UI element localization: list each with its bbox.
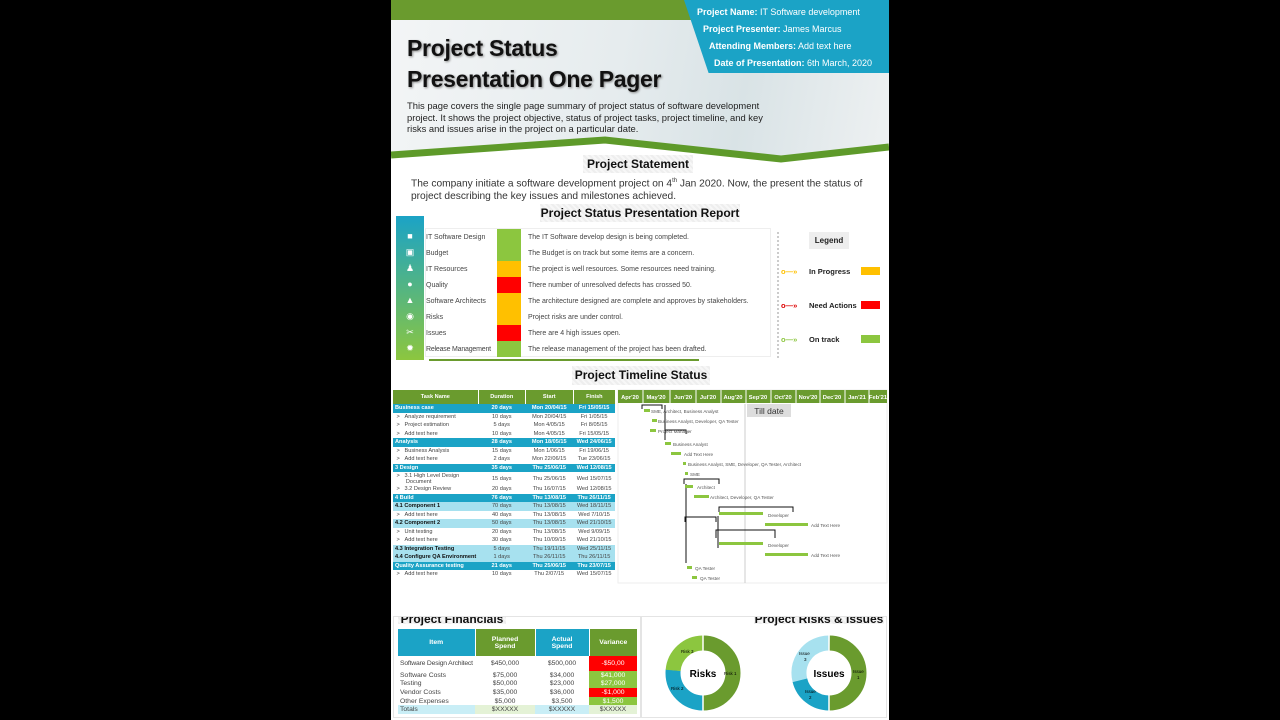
icon column: ✹	[406, 343, 414, 353]
status report table: Issues	[426, 330, 446, 336]
panel: project financials: $1,500	[603, 698, 623, 705]
chart: risks donut: Risk 1	[724, 671, 737, 676]
gantt task table: > Add text here	[397, 456, 438, 462]
gantt task table: 50 days	[492, 520, 512, 526]
gantt task table: Mon 20/04/15	[532, 405, 567, 411]
gantt task table: Thu 13/08/15	[533, 512, 566, 518]
gantt task table: > Add text here	[397, 512, 438, 518]
gantt chart: Dec'20	[823, 395, 841, 401]
gantt task table: Wed 15/07/15	[577, 476, 611, 482]
gantt task table: > Add text here	[397, 571, 438, 577]
project statement text: The company initiate a software development project on 4th Jan 2020. Now, the present the status of project describing the key issues and milestones achieved.	[411, 178, 862, 202]
heading: risks & issues	[754, 614, 884, 624]
status report table: Risks	[426, 314, 443, 320]
panel: project financials: $XXXXX	[492, 706, 518, 713]
gantt task table: Fri 19/06/15	[579, 448, 609, 454]
gantt task table: Finish	[586, 394, 603, 400]
panel: project financials: Software Costs	[400, 672, 446, 679]
gantt task table: > Add text here	[397, 431, 438, 437]
gantt task table: > Project estimation	[397, 422, 449, 428]
panel: project financials: Item	[429, 639, 443, 646]
project info box: Project Presenter: James Marcus	[703, 24, 842, 34]
gantt task table: 30 days	[492, 537, 512, 543]
status report table: The project is well resources. Some resources need training.	[528, 266, 716, 272]
project info box: Project Name: IT Software development	[697, 7, 860, 17]
icon column: ♟	[406, 263, 414, 273]
panel: project financials: Testing	[400, 680, 422, 687]
panel: project financials: -$1,000	[601, 689, 625, 696]
gantt chart: Jan'21	[848, 395, 867, 401]
gantt task table: Thu 13/08/15	[533, 520, 566, 526]
top green bar	[391, 0, 691, 20]
gantt task table: > 3.1 High Level Design	[397, 472, 459, 478]
icon column	[396, 216, 424, 360]
gantt task table: Wed 15/07/15	[577, 571, 611, 577]
gantt task table: Mon 22/06/15	[532, 456, 566, 462]
gantt task table: Wed 7/10/15	[578, 512, 610, 518]
gantt chart: QA Tester	[695, 566, 716, 571]
status report table: The Budget is on track but some items are a concern.	[528, 250, 694, 256]
status report table	[396, 216, 771, 361]
gantt task table: 5 days	[493, 422, 510, 428]
gantt task table: 4.4 Configure QA Environment	[395, 554, 476, 560]
gantt chart: Business Analyst, Developer, QA Tester	[658, 419, 739, 424]
chart: issues donut	[791, 636, 866, 710]
gantt task table: 4.1 Component 1	[395, 503, 440, 509]
legend	[777, 232, 885, 358]
gantt task table: Fri 1/05/15	[581, 414, 607, 420]
gantt chart: Till date	[754, 406, 784, 416]
icon column: ◉	[406, 311, 414, 321]
gantt task table: Thu 10/09/15	[533, 537, 566, 543]
status report table: IT Resources	[426, 266, 468, 272]
gantt task table: Fri 15/05/15	[579, 431, 609, 437]
chart: issues donut: Issue	[805, 689, 816, 694]
gantt chart: SME	[690, 472, 700, 477]
gantt chart: Business Analyst, SME, Developer, QA Tester, Architect	[688, 462, 802, 467]
chart: issues donut: 3	[804, 657, 807, 662]
gantt chart: Apr'20	[621, 395, 639, 401]
legend: Legend	[815, 236, 843, 245]
gantt chart: Architect	[697, 485, 716, 490]
gantt task table: Start	[543, 394, 556, 400]
project info box	[684, 0, 889, 73]
gantt task table: Analysis	[395, 439, 418, 445]
gantt task table: Thu 26/11/15	[578, 554, 610, 560]
panel: project financials: $XXXXX	[549, 706, 575, 713]
status report table: The IT Software develop design is being completed.	[528, 234, 689, 240]
gantt task table: Mon 4/05/15	[534, 422, 565, 428]
panel: project financials: $23,000	[550, 680, 574, 687]
gantt chart: May'20	[646, 395, 666, 401]
gantt task table: Wed 9/09/15	[578, 529, 610, 535]
panel: project financials: -$50,00	[601, 660, 625, 667]
gantt task table: Thu 13/08/15	[533, 503, 566, 509]
panel: project financials: $5,000	[495, 698, 515, 705]
panel: project financials: Software Design Architect	[400, 660, 473, 667]
chart: risks donut	[666, 636, 740, 710]
gantt task table: 4 Build	[395, 495, 414, 501]
gantt task table: Wed 18/11/15	[577, 503, 611, 509]
title: Project Status	[407, 35, 557, 61]
panel: project financials: $450,000	[491, 660, 519, 667]
gantt task table: 70 days	[492, 503, 512, 509]
gantt task table: Duration	[490, 394, 513, 400]
gantt task table	[393, 390, 615, 577]
gantt chart: Developer	[768, 513, 789, 518]
panel: project financials: Variance	[599, 639, 627, 646]
gantt task table: 15 days	[492, 476, 512, 482]
icon column: ▣	[406, 247, 414, 257]
icon column: ▲	[406, 295, 414, 305]
gantt chart	[618, 390, 888, 584]
panel: project financials: $36,000	[550, 689, 574, 696]
description: This page covers the single page summary of project status of software development project. It shows the project objective, status of project tasks, project timeline, and key risks and issues arise in the project on a particular date.	[407, 100, 763, 134]
project info box: Attending Members: Add text here	[709, 41, 852, 51]
gantt task table: 20 days	[492, 486, 512, 492]
gantt chart: Developer	[768, 543, 789, 548]
panel: project financials: $27,000	[601, 680, 625, 687]
gantt task table: Wed 12/08/15	[577, 486, 611, 492]
legend: o—»	[781, 267, 797, 276]
gantt chart: Nov'20	[799, 395, 817, 401]
gantt chart: Business Analyst	[673, 442, 708, 447]
gantt chart: Add Text Here	[811, 523, 840, 528]
status report table: There number of unresolved defects has crossed 50.	[528, 282, 692, 288]
gantt task table: Thu 26/11/15	[533, 554, 566, 560]
gantt task table: Task Name	[421, 394, 450, 400]
gantt chart: Add Text Here	[811, 553, 840, 558]
heading: financials	[398, 614, 506, 624]
gantt task table: > Analyze requirement	[397, 414, 456, 420]
gantt task table: Document	[406, 478, 431, 484]
gantt chart: Feb'21	[869, 395, 888, 401]
panel: project risks & issues	[641, 616, 887, 718]
gantt task table: 20 days	[492, 529, 512, 535]
chart: issues donut: Issue	[853, 669, 864, 674]
panel: project financials: Other Expenses	[400, 698, 449, 705]
gantt task table: Wed 25/11/15	[577, 546, 611, 552]
title	[407, 35, 664, 94]
status report table: There are 4 high issues open.	[528, 330, 621, 336]
status report table: Quality	[426, 282, 448, 288]
gantt task table: 20 days	[491, 405, 512, 411]
panel: project financials: Spend	[495, 642, 515, 650]
gantt task table: Wed 21/10/15	[577, 520, 611, 526]
chart: risks donut: Risk 3	[681, 649, 694, 654]
gantt task table: Mon 4/05/15	[534, 431, 565, 437]
green chevron band	[391, 136, 889, 165]
chart: risks donut: Risk 2	[671, 686, 684, 691]
gantt chart: Add Text Here	[684, 452, 713, 457]
legend: o—»	[781, 301, 797, 310]
panel: project financials: Planned	[492, 636, 518, 642]
gantt task table: Tue 23/06/15	[578, 456, 610, 462]
gantt chart: Oct'20	[774, 395, 792, 401]
heading: timeline: Project Timeline Status	[575, 368, 707, 382]
gantt task table: Mon 18/05/15	[532, 439, 567, 445]
gantt task table: 15 days	[492, 448, 512, 454]
gantt chart: Jul'20	[700, 395, 716, 401]
gantt chart: Aug'20	[723, 395, 743, 401]
panel: project financials: $50,000	[493, 680, 517, 687]
panel: project financials: Actual	[552, 636, 572, 642]
chart: risks donut: Risks	[690, 669, 717, 680]
project info box: Date of Presentation: 6th March, 2020	[714, 58, 872, 68]
gantt task table: 3 Design	[395, 465, 418, 471]
gantt task table: 10 days	[492, 431, 512, 437]
gantt task table: Thu 25/06/15	[533, 476, 566, 482]
gantt task table: 21 days	[491, 563, 512, 569]
icon column: ✂	[406, 327, 414, 337]
heading: report: Project Status Presentation Report	[541, 206, 739, 220]
gantt chart: QA Tester	[700, 576, 721, 581]
status report table: The architecture designed are complete and approves by stakeholders.	[528, 298, 749, 304]
gantt task table: Thu 26/11/15	[577, 495, 611, 501]
panel: project financials	[393, 616, 641, 718]
status report table: Software Architects	[426, 298, 486, 304]
chart: issues donut: Issue	[799, 651, 810, 656]
gantt task table: Thu 13/08/15	[532, 495, 566, 501]
gantt task table: Mon 1/06/15	[534, 448, 565, 454]
gantt task table: > Add text here	[397, 537, 438, 543]
gantt task table: Quality Assurance testing	[395, 563, 464, 569]
legend: In Progress	[809, 267, 850, 276]
title: Presentation One Pager	[407, 66, 661, 92]
status report table: Budget	[426, 250, 448, 256]
status report table: Project risks are under control.	[528, 314, 623, 320]
gantt task table: 40 days	[492, 512, 512, 518]
status report table: The release management of the project has been drafted.	[528, 346, 707, 352]
gantt task table: Thu 25/06/15	[532, 465, 566, 471]
panel: project financials: $500,000	[548, 660, 576, 667]
status report table: IT Software Design	[426, 234, 485, 240]
heading: project statement: Project Statement	[587, 157, 689, 171]
gantt task table: > Business Analysis	[397, 448, 449, 454]
gantt task table: Wed 12/08/15	[577, 465, 612, 471]
gantt task table: 35 days	[491, 465, 512, 471]
gantt task table: Thu 16/07/15	[533, 486, 566, 492]
panel: project financials: $34,000	[550, 672, 574, 679]
legend: o—»	[781, 335, 797, 344]
panel: project financials: $XXXXX	[600, 706, 626, 713]
gantt chart: SME, Architect, Business Analyst	[651, 409, 719, 414]
icon column: ■	[407, 231, 413, 241]
gantt task table: 10 days	[492, 571, 512, 577]
panel: project financials: Spend	[552, 642, 572, 650]
gantt task table: Mon 20/04/15	[532, 414, 566, 420]
gantt task table: Business case	[395, 405, 434, 411]
gantt task table: Thu 25/06/15	[532, 563, 566, 569]
chart: issues donut: 1	[857, 675, 860, 680]
header background	[391, 0, 889, 165]
gantt task table: > 3.2 Design Review	[397, 486, 451, 492]
panel: project financials: Vendor Costs	[400, 689, 441, 696]
gantt task table: 1 days	[493, 554, 510, 560]
gantt task table: Fri 8/05/15	[581, 422, 607, 428]
chart: issues donut: 2	[809, 695, 812, 700]
gantt task table: Wed 21/10/15	[577, 537, 611, 543]
chart: issues donut: Issues	[813, 669, 845, 680]
panel: project financials: $3,500	[552, 698, 572, 705]
panel: project financials: Totals	[400, 706, 418, 713]
gantt task table: > Unit testing	[397, 529, 432, 535]
gantt task table: Thu 2/07/15	[534, 571, 564, 577]
gantt task table: 76 days	[491, 495, 512, 501]
gantt chart: Jun'20	[674, 395, 692, 401]
panel: project financials: $41,000	[601, 672, 625, 679]
gantt task table: 4.2 Component 2	[395, 520, 440, 526]
gantt task table: Thu 19/11/15	[533, 546, 566, 552]
gantt task table: 4.3 Integration Testing	[395, 546, 454, 552]
gantt task table: Fri 15/05/15	[579, 405, 609, 411]
gantt task table: Thu 13/08/15	[533, 529, 566, 535]
status report table: Release Management	[426, 346, 491, 352]
gantt task table: 10 days	[492, 414, 512, 420]
legend: On track	[809, 335, 839, 344]
panel: project financials: $35,000	[493, 689, 517, 696]
gantt task table: 2 days	[493, 456, 510, 462]
gantt task table: Wed 24/06/15	[577, 439, 612, 445]
gantt chart: Architect, Developer, QA Tester	[710, 495, 774, 500]
gantt task table: 28 days	[491, 439, 512, 445]
icon column: ●	[407, 279, 413, 289]
gantt chart: Sep'20	[749, 395, 767, 401]
gantt task table: Thu 23/07/15	[577, 563, 611, 569]
panel: project financials: $75,000	[493, 672, 517, 679]
gantt chart: Project Manager	[658, 429, 692, 434]
gantt task table: 5 days	[493, 546, 510, 552]
legend: Need Actions	[809, 301, 857, 310]
